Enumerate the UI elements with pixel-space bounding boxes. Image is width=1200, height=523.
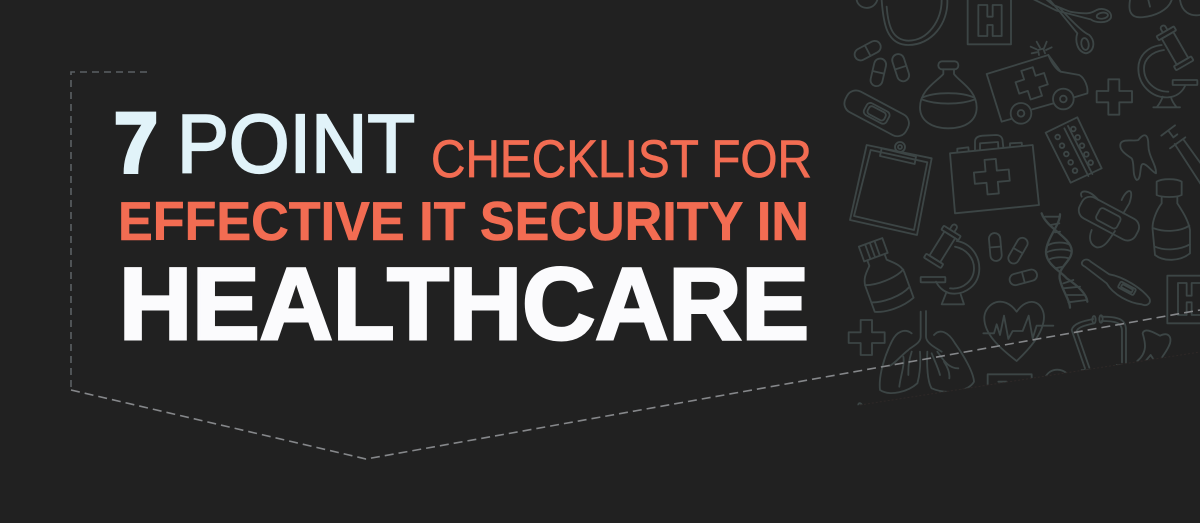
icon: ambulance (987, 42, 1088, 124)
dashed frame (71, 72, 1200, 459)
title line 1: 7 POINT: POINT (177, 97, 415, 190)
icon: hospital sign (968, 0, 1011, 44)
icon: tooth (1120, 135, 1156, 180)
icon: medicine bottle left (858, 237, 914, 313)
title line 1: checklist for: CHECKLIST FOR (431, 130, 812, 189)
icon: capsules (852, 39, 911, 87)
icon: syringe (1161, 125, 1200, 184)
frame: top and left edge (71, 72, 147, 390)
icon: tooth lower (1137, 330, 1170, 363)
icon: stethoscope top (857, 0, 947, 45)
icon: lungs (880, 311, 974, 393)
lower icons (849, 179, 1200, 411)
title line 1: 7 POINT: 7 (114, 96, 158, 191)
icon: microscope lower (921, 220, 979, 304)
icon: crossed bandages (1075, 191, 1142, 247)
upper icons (841, 0, 1200, 235)
icon: hospital sign clipped (986, 374, 1032, 385)
title line 3: HEALTHCARE (119, 247, 809, 361)
icon: capsules lower (988, 233, 1038, 286)
icon: bandage (844, 90, 910, 137)
medical icon pattern (841, 0, 1200, 411)
icon: stethoscope fragment (1045, 368, 1067, 376)
icon: flask (920, 61, 977, 128)
icon: stethoscope lower (1072, 315, 1127, 370)
frame: chevron bottom edge (71, 310, 1200, 459)
icon: first aid kit (950, 135, 1039, 213)
icon: scissors (1032, 0, 1111, 53)
icon: heart with pulse (983, 302, 1053, 361)
icon: hospital sign right (1167, 276, 1200, 323)
faint clipped edge line (860, 352, 1200, 405)
title line 2: EFFECTIVE IT SECURITY IN (118, 190, 809, 252)
icon: DNA helix (1042, 213, 1087, 308)
icon: medicine bottle right (1153, 179, 1190, 260)
title (114, 96, 812, 361)
icon: pill fragments (1129, 0, 1200, 17)
icon: thermometer (1082, 259, 1150, 305)
icon: plus (1097, 79, 1132, 115)
icon: microscope (1138, 21, 1197, 107)
icon: blister pack (1046, 117, 1102, 183)
icon: plus lower (849, 320, 885, 355)
icon: bottom fragments (858, 402, 862, 406)
icon: clipboard (850, 142, 932, 235)
